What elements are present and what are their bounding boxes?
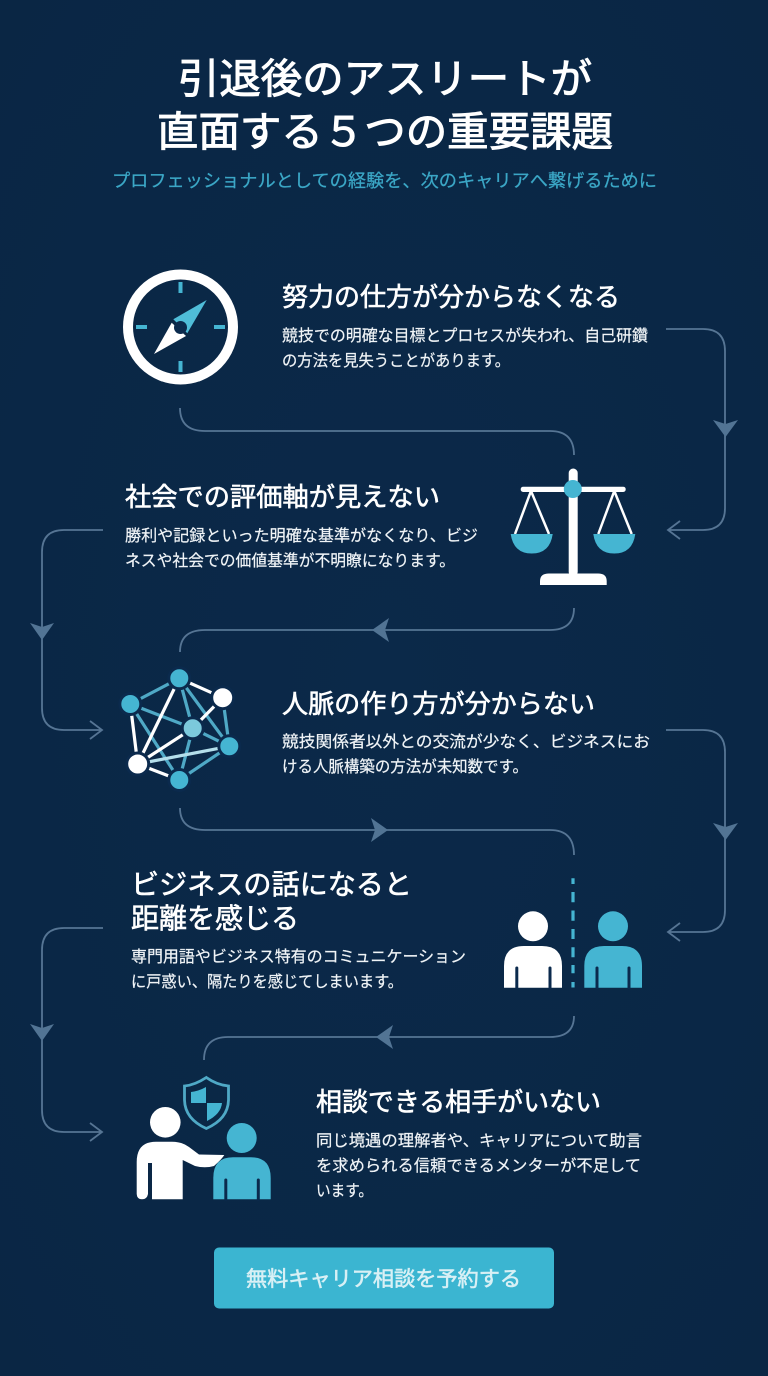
icon: mentor with shield (137, 1078, 271, 1199)
subtitle: プロフェッショナルとしての経験を、次のキャリアへ繋げるために (112, 171, 657, 191)
icon: compass (128, 274, 233, 380)
connector: step 1 text to scales (666, 329, 738, 539)
text: step 2 body (125, 527, 478, 570)
button: call to action: 無料キャリア相談を予約する (246, 1268, 521, 1291)
button: call to action (214, 1248, 554, 1308)
text: step 4 body (131, 948, 466, 991)
connector: step 3 text to people (666, 730, 738, 941)
text: step 4 body: に戸惑い、隔たりを感じてしまいます。 (131, 973, 403, 991)
heading: step 4: ビジネスの話になると (131, 869, 412, 900)
icon: two separated people (504, 878, 642, 988)
text: step 5 body: います。 (316, 1182, 373, 1200)
connector: step 1 to step 2 left route (180, 408, 574, 455)
connector: people to mentor (204, 1016, 574, 1060)
text: step 2 body: 勝利や記録といった明確な基準がなくなり、ビジ (125, 527, 478, 545)
title: 引退後のアスリートが (178, 56, 592, 102)
connector: scales to network (180, 608, 574, 652)
heading: step 5: 相談できる相手がいない (316, 1087, 601, 1117)
panel: step 3 (120, 668, 650, 790)
panel: step 5 (137, 1078, 642, 1200)
text: step 1 body (282, 327, 648, 370)
text: step 3 body (282, 733, 650, 776)
heading: step 1: 努力の仕方が分からなくなる (282, 282, 620, 312)
heading: step 2: 社会での評価軸が見えない (125, 482, 440, 512)
text: step 1 body: 競技での明確な目標とプロセスが失われ、自己研鑽 (282, 327, 648, 345)
icon: scales (511, 468, 635, 585)
text: step 5 body: 同じ境遇の理解者や、キャリアについて助言 (316, 1132, 642, 1150)
text: step 4 body: 専門用語やビジネス特有のコミュニケーション (131, 948, 466, 966)
panel: step 1 (128, 274, 648, 380)
heading: step 3: 人脈の作り方が分からない (282, 689, 595, 719)
panel: step 2 (125, 468, 635, 585)
heading: step 4: 距離を感じる (131, 903, 299, 934)
heading: step 4 (131, 869, 412, 934)
icon: network (120, 668, 240, 790)
text: step 1 body: の方法を見失うことがあります。 (282, 352, 510, 370)
text: step 3 body: 競技関係者以外との交流が少なく、ビジネスにお (282, 733, 650, 751)
text: step 3 body: ける人脈構築の方法が未知数です。 (282, 758, 528, 776)
panel: step 4 (131, 869, 642, 991)
title: 直面する５つの重要課題 (157, 109, 613, 155)
text: step 2 body: ネスや社会での価値基準が不明瞭になります。 (125, 552, 455, 570)
connector: network to people (180, 808, 574, 855)
title (157, 56, 613, 155)
text: step 5 body: を求められる信頼できるメンターが不足して (316, 1157, 641, 1175)
text: step 5 body (316, 1132, 642, 1200)
connector: step 4 text to mentor (30, 928, 103, 1141)
connector: step 2 text to network (30, 530, 103, 739)
